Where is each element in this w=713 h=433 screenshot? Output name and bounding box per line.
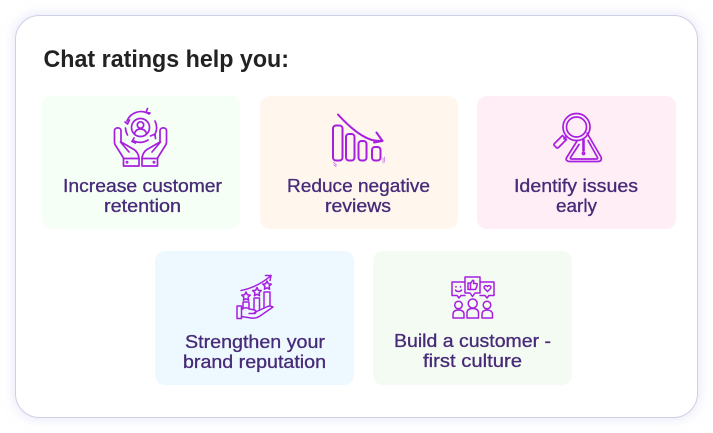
title: Chat ratings help you:	[44, 46, 289, 73]
panel: reduce negative reviews	[260, 96, 458, 229]
label: early	[556, 196, 597, 216]
panel: increase customer retention	[42, 96, 240, 229]
icon: declining bar chart	[333, 114, 384, 166]
label: Reduce negative	[287, 176, 430, 196]
icon: magnifier and warning triangle	[554, 114, 601, 162]
label	[514, 176, 638, 216]
icon: people with feedback bubbles	[452, 277, 494, 318]
panel: strengthen brand reputation	[155, 251, 354, 385]
label	[394, 331, 551, 371]
label: Build a customer -	[394, 331, 551, 351]
label: retention	[104, 196, 181, 216]
label: brand reputation	[183, 352, 326, 372]
icon: hand with rising star bars	[237, 276, 273, 318]
label: reviews	[325, 196, 391, 216]
label: Strengthen your	[185, 332, 325, 352]
label	[287, 176, 430, 216]
panel: customer-first culture	[373, 251, 572, 385]
panel: identify issues early	[477, 96, 676, 229]
label: first culture	[423, 351, 522, 371]
label: Increase customer	[63, 176, 222, 196]
label	[63, 176, 222, 216]
icon: hands holding customer	[114, 108, 166, 166]
label	[183, 332, 326, 372]
label: Identify issues	[514, 176, 638, 196]
